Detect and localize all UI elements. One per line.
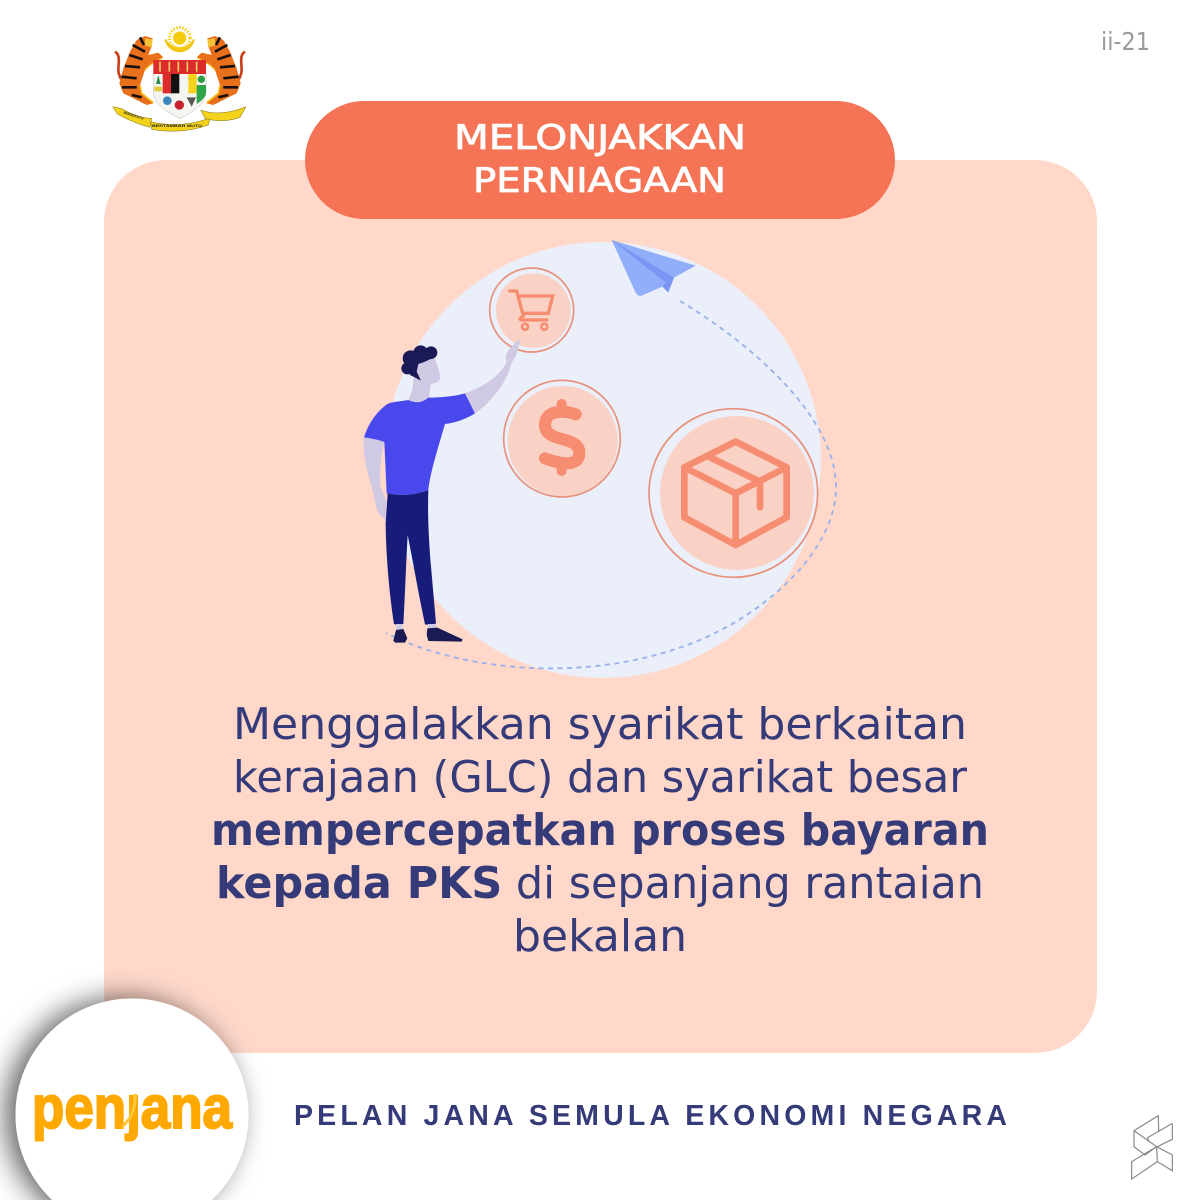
figure: socks [396,624,436,630]
footer tagline: PELAN JANA SEMULA EKONOMI NEGARA [294,1100,1007,1132]
body text: kepada PKS di sepanjang rantaian [216,858,984,909]
icon: shopping cart coin [490,268,574,352]
figure: trousers [386,490,436,625]
crest: left tiger [115,36,163,105]
icon: publisher mark [1132,1116,1172,1179]
crest: right tiger [197,36,245,105]
logo circle: penjana [16,998,248,1200]
body text [211,699,989,962]
crest: motto scroll [113,107,246,131]
body text: mempercepatkan proses bayaran [211,805,989,856]
body text: bekalan [513,911,687,962]
figure: raised arm [465,337,522,413]
dashed flight path [386,301,836,668]
heading pill [305,101,895,219]
crest: motto scroll: BERSEKUTU [123,110,145,121]
icon: paper plane [612,240,696,296]
icon: dollar coin [504,380,620,497]
coat of arms [113,28,246,131]
crest: motto scroll: BERTAMBAH MUTU [152,124,203,128]
figure: hair [401,345,437,381]
crest: shield [153,60,206,119]
logo circle: penjana: penjana [32,1074,233,1141]
figure: man pointing [363,337,522,643]
body text: Menggalakkan syarikat berkaitan [233,699,967,750]
figure: shoes [393,628,463,643]
body text: kerajaan (GLC) dan syarikat besar [233,752,968,803]
heading pill: MELONJAKKAN [454,118,746,158]
heading pill: PERNIAGAAN [473,161,726,201]
illustration backdrop circle [385,242,821,678]
crest: sun and crescent [165,28,194,51]
figure: lowered arm [363,437,387,519]
figure: t-shirt [364,393,475,495]
panel: main background [104,160,1097,1053]
icon: parcel box coin [649,409,818,577]
page number: ii-21 [1101,27,1150,56]
figure: head and neck [408,358,440,403]
